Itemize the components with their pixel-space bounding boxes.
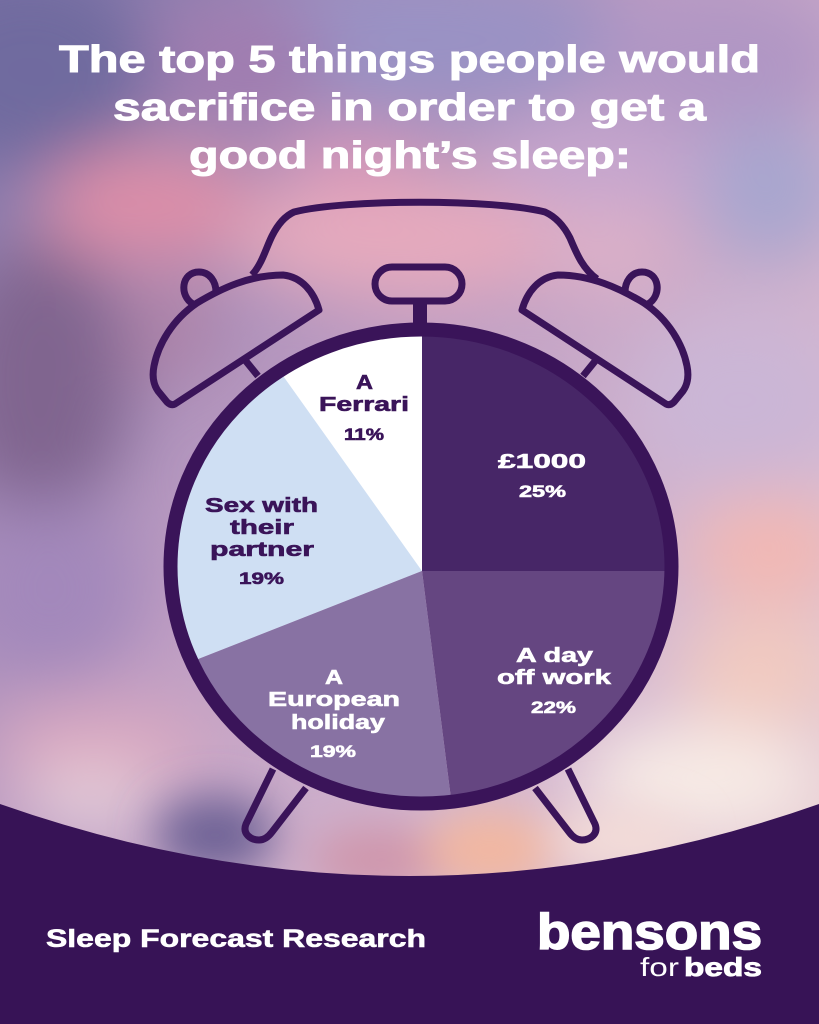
title bbox=[59, 39, 760, 177]
footer band bbox=[0, 804, 819, 1024]
label: sex with their partner bbox=[205, 495, 318, 588]
title: good night’s sleep: bbox=[189, 135, 631, 177]
bensons for beds logo: bensons bbox=[537, 904, 762, 960]
pie chart bbox=[178, 336, 664, 796]
label: a European holiday: European bbox=[268, 689, 400, 711]
clock bells, handle and legs bbox=[153, 202, 688, 840]
label: a day off work: off work bbox=[497, 667, 612, 689]
left leg bbox=[245, 769, 306, 840]
label: a day off work: 22% bbox=[531, 699, 576, 717]
label: a European holiday: 19% bbox=[310, 743, 356, 761]
label: £1000 bbox=[498, 451, 586, 501]
label: £1000: 25% bbox=[519, 483, 566, 501]
label: a European holiday bbox=[268, 667, 400, 761]
handle bbox=[252, 202, 597, 279]
title: The top 5 things people would bbox=[59, 39, 760, 81]
right bell stub bbox=[583, 360, 596, 376]
label: sex with their partner: 19% bbox=[239, 570, 284, 588]
label: sex with their partner: partner bbox=[210, 539, 314, 561]
alarm clock bbox=[140, 202, 700, 840]
slice: a European holiday 19% bbox=[198, 571, 450, 796]
label: a European holiday: holiday bbox=[291, 712, 386, 734]
label: sex with their partner: Sex with bbox=[205, 495, 318, 517]
left bell knob bbox=[184, 272, 216, 304]
bensons for beds logo: for bbox=[640, 952, 679, 982]
label: a day off work: A day bbox=[516, 645, 594, 667]
right bell bbox=[522, 275, 688, 405]
label: £1000: £1000 bbox=[498, 451, 586, 473]
clock ring bbox=[170, 330, 672, 804]
label: sex with their partner: their bbox=[230, 517, 294, 539]
label: a Ferrari: 11% bbox=[344, 426, 384, 444]
label: a European holiday: A bbox=[325, 667, 343, 689]
left bell stub bbox=[245, 360, 258, 376]
slice: a Ferrari 11% bbox=[284, 336, 422, 571]
top button bbox=[375, 267, 462, 301]
slice: a day off work 22% bbox=[422, 571, 664, 795]
bensons for beds logo bbox=[537, 904, 762, 982]
right bell knob bbox=[625, 272, 657, 304]
bensons for beds logo: beds bbox=[684, 952, 762, 982]
label: a Ferrari bbox=[319, 372, 409, 444]
source text: Sleep Forecast Research bbox=[46, 925, 426, 953]
label: a Ferrari: A bbox=[356, 372, 373, 394]
button stem bbox=[413, 301, 427, 327]
left bell bbox=[153, 275, 319, 405]
label: a day off work bbox=[497, 645, 612, 717]
slice: sex with their partner 19% bbox=[178, 376, 422, 659]
label: a Ferrari: Ferrari bbox=[319, 394, 409, 416]
right leg bbox=[535, 769, 596, 840]
slice: £1000 25% bbox=[422, 336, 664, 571]
title: sacrifice in order to get a bbox=[113, 87, 707, 129]
